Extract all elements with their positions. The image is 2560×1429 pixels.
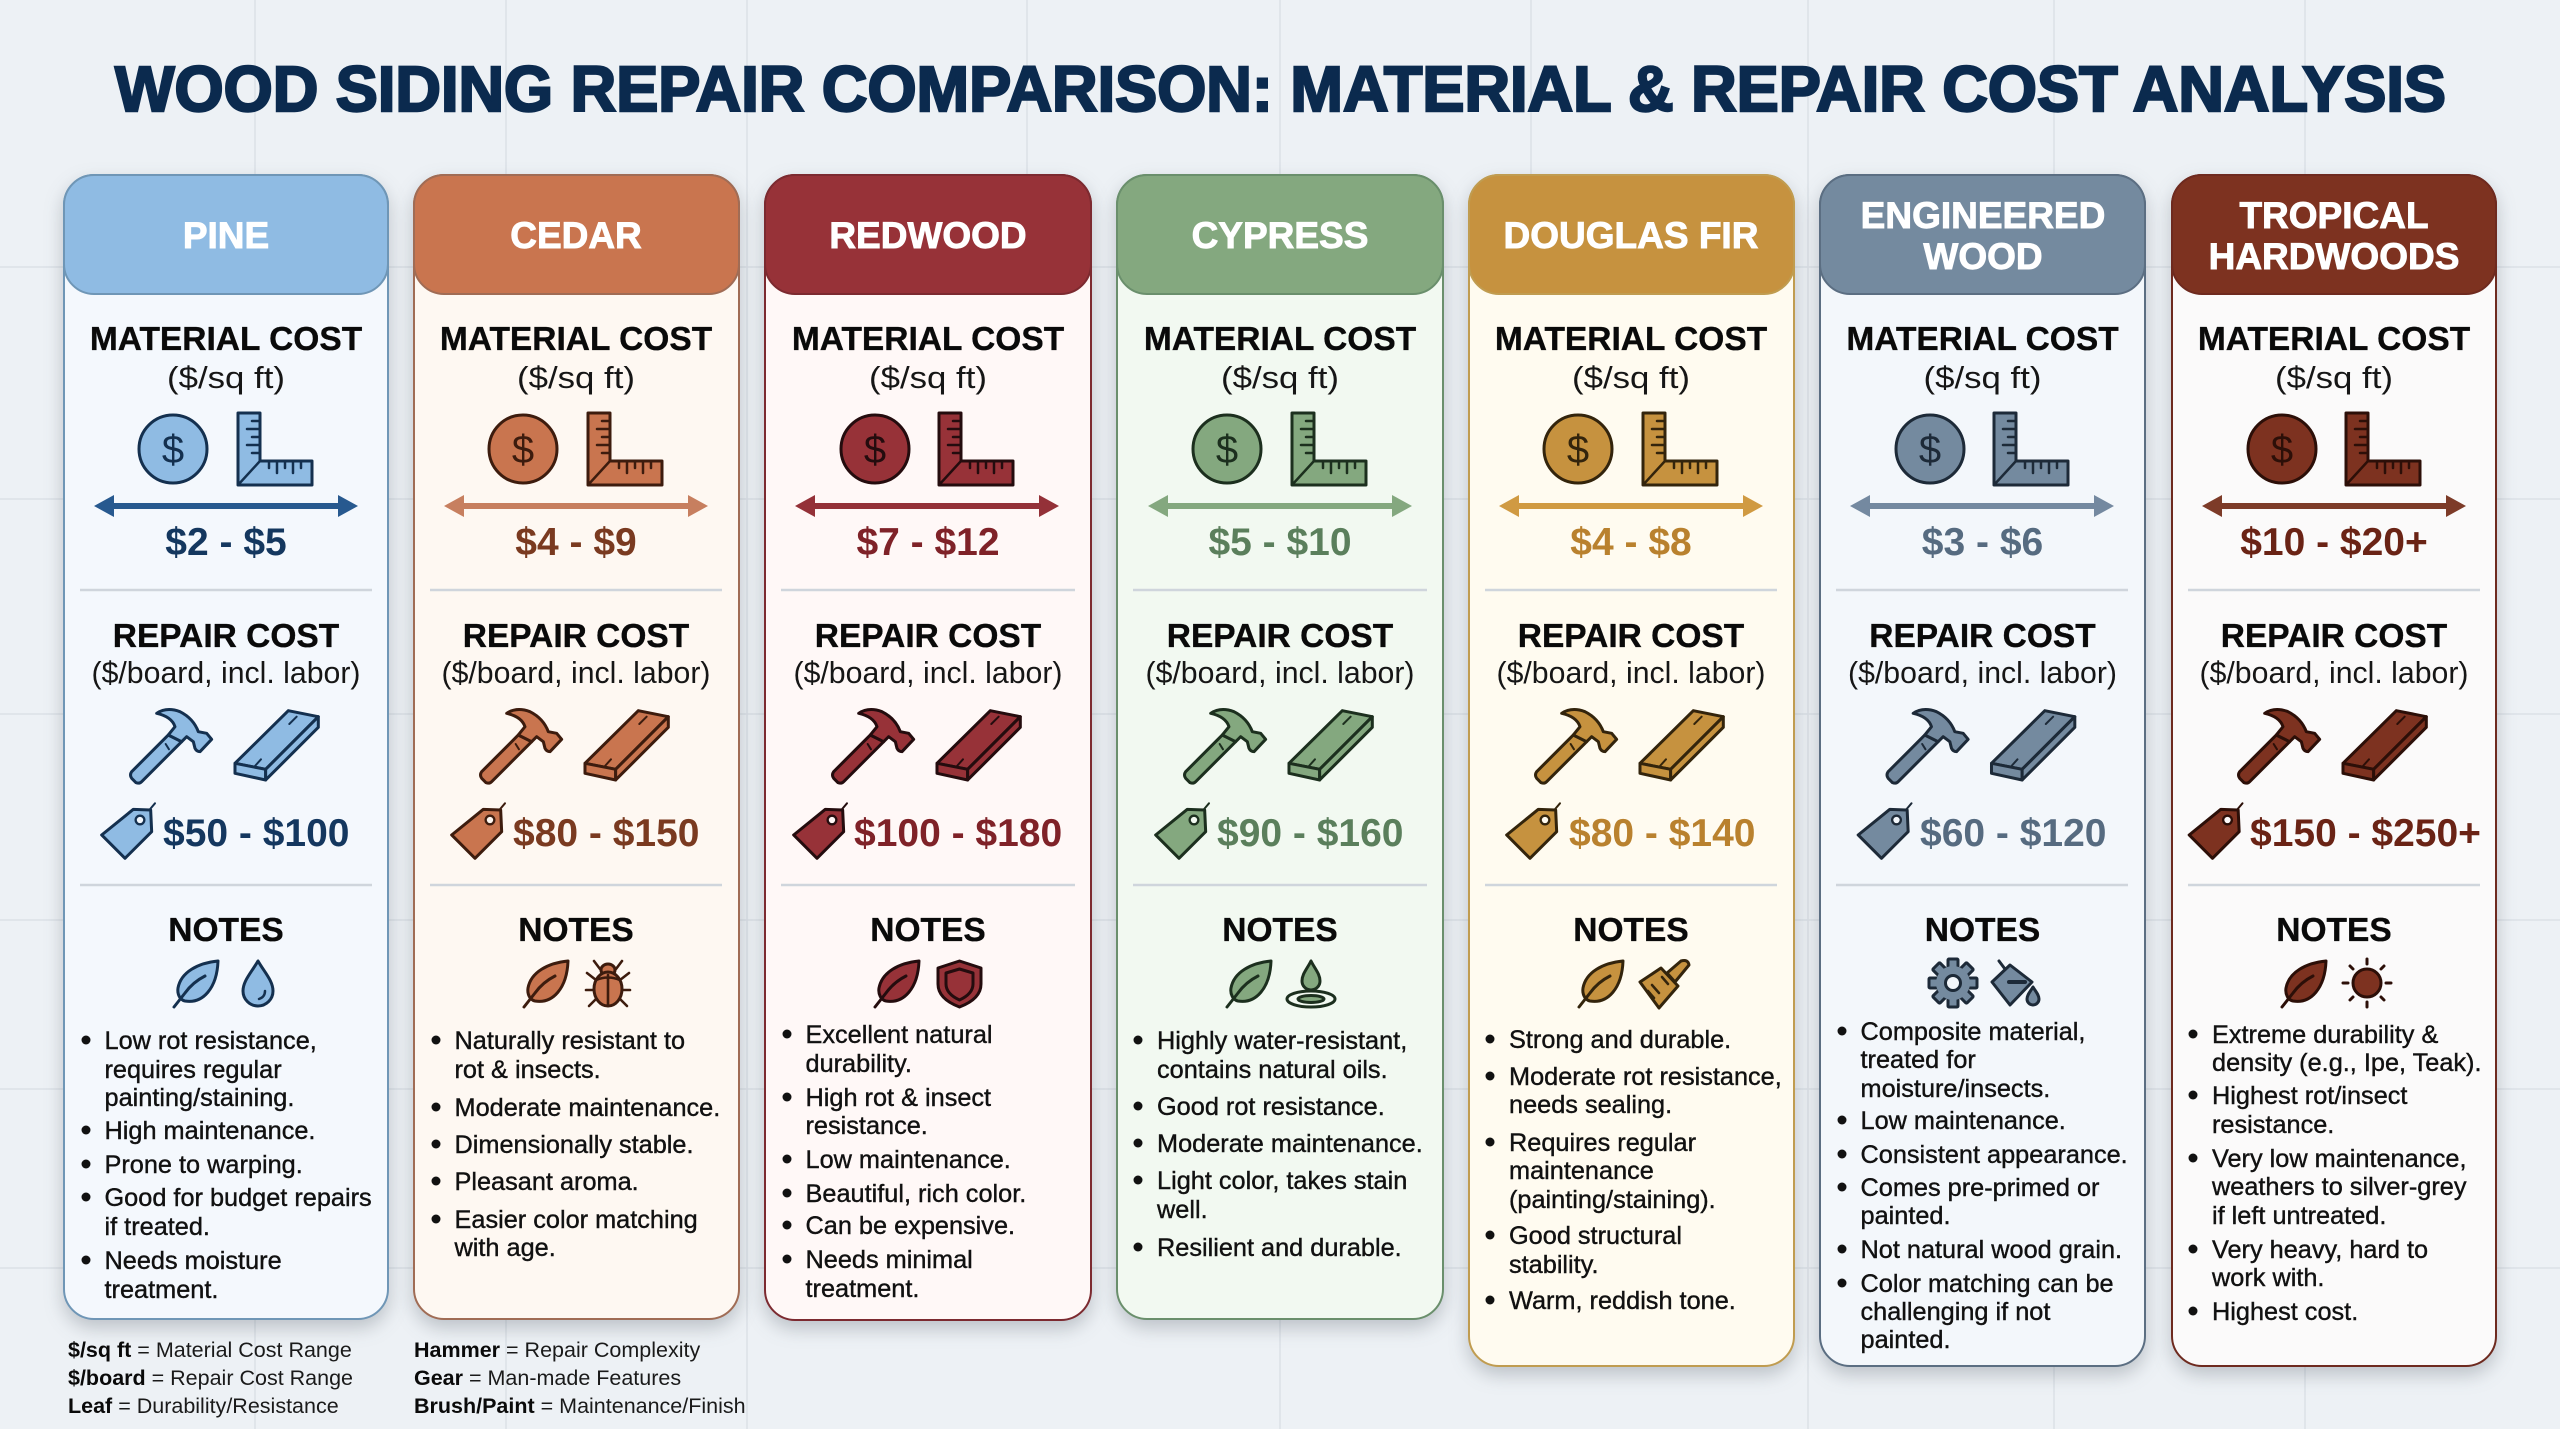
panel: redwood	[765, 175, 1091, 1320]
material price: $2 - $5	[165, 521, 287, 564]
legend: right column: Gear	[414, 1366, 464, 1390]
section: material cost: MATERIAL COST	[1846, 321, 2119, 358]
arrow: range	[795, 495, 1059, 517]
icon: coin: $	[864, 428, 886, 472]
header: tropical hardwoods	[2172, 175, 2496, 294]
card body	[414, 175, 739, 1319]
icon: coin	[1193, 415, 1261, 483]
notes list: challenging if not	[1860, 1298, 2050, 1326]
header: douglas fir: DOUGLAS FIR	[1504, 215, 1758, 256]
notes list: density (e.g., Ipe, Teak).	[2212, 1049, 2482, 1077]
section: material cost: ($/sq ft)	[1924, 360, 2042, 395]
card body	[2172, 175, 2496, 1366]
icon: board	[1289, 711, 1372, 780]
panel: douglas fir	[1469, 175, 1794, 1366]
icon: price tag	[102, 803, 155, 858]
section: material cost	[2198, 321, 2471, 564]
notes list: requires regular	[104, 1056, 282, 1084]
icon: coin	[1544, 415, 1612, 483]
notes list: Highest rot/insect	[2212, 1082, 2407, 1110]
repair price: $90 - $160	[1217, 812, 1404, 855]
notes list: resistance.	[806, 1112, 928, 1140]
notes list: Moderate rot resistance,	[1509, 1063, 1782, 1091]
notes list	[2188, 1021, 2482, 1326]
section: material cost	[440, 321, 713, 564]
notes list: painting/staining.	[104, 1084, 294, 1112]
notes list: Good rot resistance.	[1157, 1093, 1385, 1121]
legend: right column: Brush/Paint	[414, 1394, 535, 1418]
panel: engineered wood	[1820, 175, 2145, 1366]
notes list: rot & insects.	[454, 1056, 601, 1084]
section: repair cost	[1146, 618, 1414, 858]
section: repair cost	[2189, 618, 2481, 858]
section: material cost	[90, 321, 363, 564]
section: notes	[432, 912, 720, 1262]
section: material cost: MATERIAL COST	[440, 321, 713, 358]
notes list: Strong and durable.	[1509, 1026, 1731, 1054]
repair price: $80 - $150	[513, 812, 700, 855]
section: material cost: MATERIAL COST	[2198, 321, 2471, 358]
notes list: Color matching can be	[1860, 1270, 2114, 1298]
section: material cost	[792, 321, 1065, 564]
section: material cost: MATERIAL COST	[792, 321, 1065, 358]
icon: coin	[2248, 415, 2316, 483]
icon: coin	[1896, 415, 1964, 483]
notes list: Prone to warping.	[104, 1151, 303, 1179]
material price: $10 - $20+	[2240, 521, 2428, 564]
notes list	[432, 1027, 720, 1262]
notes list: Naturally resistant to	[454, 1027, 685, 1055]
section: repair cost	[442, 618, 710, 858]
notes list: Needs moisture	[104, 1247, 282, 1275]
repair price: $60 - $120	[1920, 812, 2106, 855]
header: tropical hardwoods: HARDWOODS	[2209, 236, 2459, 277]
notes list: contains natural oils.	[1157, 1056, 1388, 1084]
icon: board	[2343, 711, 2426, 780]
notes list: treatment.	[806, 1275, 919, 1303]
icon: coin	[139, 415, 207, 483]
notes list: (painting/staining).	[1509, 1186, 1716, 1214]
icon: coin: $	[162, 428, 184, 472]
notes list: Consistent appearance.	[1860, 1141, 2128, 1169]
icon: paint brush	[1640, 960, 1689, 1008]
section: material cost: MATERIAL COST	[1144, 321, 1417, 358]
icon: coin: $	[1567, 428, 1589, 472]
notes list: maintenance	[1509, 1157, 1654, 1185]
icon: square ruler	[1994, 413, 2068, 485]
section: repair cost	[794, 618, 1062, 858]
legend: left column: = Material Cost Range	[131, 1338, 352, 1362]
icon: hammer	[130, 710, 212, 783]
notes list: Dimensionally stable.	[454, 1131, 694, 1159]
notes list: Warm, reddish tone.	[1509, 1287, 1736, 1315]
legend: right column: = Repair Complexity	[500, 1338, 700, 1362]
notes list: resistance.	[2212, 1111, 2334, 1139]
legend: left column: $/sq ft	[68, 1338, 131, 1362]
header: pine: PINE	[183, 215, 269, 256]
icon: price tag	[794, 803, 847, 858]
section: notes: NOTES	[168, 912, 284, 949]
section: repair cost	[1496, 618, 1766, 858]
legend: left column: = Repair Cost Range	[146, 1366, 353, 1390]
section: material cost: ($/sq ft)	[2275, 360, 2393, 395]
icon: insect	[586, 961, 630, 1006]
repair price: $100 - $180	[854, 812, 1062, 855]
header: pine	[64, 175, 388, 294]
icon: coin: $	[2271, 428, 2293, 472]
icon: coin: $	[1216, 428, 1238, 472]
section: notes	[782, 912, 1026, 1303]
icon: hammer	[1184, 710, 1266, 783]
panel: cedar	[414, 175, 739, 1319]
notes list: Composite material,	[1860, 1018, 2085, 1046]
icon: shield	[938, 961, 981, 1007]
icon: coin: $	[512, 428, 534, 472]
notes list: painted.	[1860, 1202, 1951, 1230]
notes list: Not natural wood grain.	[1860, 1236, 2122, 1264]
header: redwood	[765, 175, 1091, 294]
section: material cost: ($/sq ft)	[869, 360, 987, 395]
notes list: Easier color matching	[454, 1206, 698, 1234]
section: material cost: ($/sq ft)	[167, 360, 285, 395]
arrow: range	[94, 495, 358, 517]
notes list: Very low maintenance,	[2212, 1145, 2467, 1173]
section: notes	[1486, 912, 1782, 1315]
legend: right column: = Maintenance/Finish	[535, 1394, 746, 1418]
arrow: range	[2202, 495, 2466, 517]
material price: $4 - $8	[1570, 521, 1692, 564]
notes list: Low rot resistance,	[104, 1027, 317, 1055]
arrow: range	[1148, 495, 1412, 517]
material price: $4 - $9	[515, 521, 637, 564]
repair price: $50 - $100	[163, 812, 350, 855]
notes list	[82, 1027, 372, 1304]
icon: hammer	[832, 710, 914, 783]
section: repair cost: REPAIR COST	[463, 618, 690, 655]
notes list: work with.	[2211, 1264, 2324, 1292]
icon: board	[937, 711, 1020, 780]
section: repair cost: REPAIR COST	[1518, 618, 1745, 655]
title: WOOD SIDING REPAIR COMPARISON: MATERIAL & REPAIR COST ANALYSIS	[115, 53, 2446, 125]
notes list: Highly water-resistant,	[1157, 1027, 1407, 1055]
icon: hammer	[480, 710, 562, 783]
repair price: $80 - $140	[1569, 812, 1756, 855]
notes list: moisture/insects.	[1860, 1075, 2050, 1103]
notes list: with age.	[454, 1234, 556, 1262]
section: notes: NOTES	[1222, 912, 1338, 949]
icon: price tag	[1858, 803, 1911, 858]
notes list: painted.	[1860, 1326, 1951, 1354]
notes list: Needs minimal	[806, 1246, 973, 1274]
icon: price tag	[1156, 803, 1209, 858]
legend: left column: $/board	[68, 1366, 146, 1390]
section: notes: NOTES	[518, 912, 634, 949]
icon: coin	[489, 415, 557, 483]
section: material cost	[1495, 321, 1768, 564]
notes list: Highest cost.	[2212, 1298, 2358, 1326]
section: material cost: MATERIAL COST	[90, 321, 363, 358]
legend: right column: = Man-made Features	[463, 1366, 681, 1390]
notes list: needs sealing.	[1509, 1091, 1672, 1119]
icon: sun	[2343, 959, 2391, 1007]
card body	[64, 175, 388, 1319]
section: notes: NOTES	[1925, 912, 2040, 949]
notes list: if left untreated.	[2212, 1202, 2386, 1230]
section: notes	[1134, 912, 1423, 1262]
notes list: treatment.	[104, 1276, 218, 1304]
icon: board	[235, 711, 318, 780]
icon: hammer	[2238, 710, 2320, 783]
header: engineered wood: WOOD	[1923, 236, 2043, 277]
arrow: range	[1499, 495, 1763, 517]
section: repair cost: ($/board, incl. labor)	[1146, 655, 1414, 690]
icon: leaf	[174, 961, 218, 1007]
icon: leaf	[2282, 961, 2326, 1007]
material price: $7 - $12	[856, 521, 1000, 564]
material price: $3 - $6	[1922, 521, 2043, 564]
panel: pine	[64, 175, 388, 1319]
notes list: stability.	[1509, 1251, 1599, 1279]
notes list: Moderate maintenance.	[454, 1094, 720, 1122]
panel: cypress	[1117, 175, 1443, 1319]
notes list	[1838, 1018, 2128, 1354]
notes list: High maintenance.	[104, 1117, 315, 1145]
notes list: Light color, takes stain	[1157, 1167, 1407, 1195]
notes list: Low maintenance.	[1860, 1107, 2066, 1135]
arrow: range	[444, 495, 708, 517]
notes list	[1486, 1026, 1782, 1315]
section: repair cost: ($/board, incl. labor)	[2200, 655, 2468, 690]
header: engineered wood: ENGINEERED	[1861, 195, 2105, 236]
notes list: weathers to silver-grey	[2211, 1173, 2467, 1201]
section: notes: NOTES	[2276, 912, 2392, 949]
icon: hammer	[1535, 710, 1617, 783]
icon: board	[1991, 711, 2075, 780]
icon: coin	[841, 415, 909, 483]
repair price: $150 - $250+	[2250, 812, 2481, 855]
notes list: Low maintenance.	[806, 1146, 1011, 1174]
section: repair cost: ($/board, incl. labor)	[794, 655, 1062, 690]
notes list: well.	[1156, 1196, 1208, 1224]
notes list: Good for budget repairs	[104, 1184, 372, 1212]
card body	[1117, 175, 1443, 1319]
section: notes: NOTES	[1573, 912, 1689, 949]
section: repair cost: ($/board, incl. labor)	[1848, 655, 2117, 690]
header: cypress	[1117, 175, 1443, 294]
section: repair cost: REPAIR COST	[2221, 618, 2448, 655]
section: repair cost: REPAIR COST	[1167, 618, 1394, 655]
notes list: Beautiful, rich color.	[806, 1180, 1026, 1208]
section: material cost: ($/sq ft)	[1221, 360, 1339, 395]
legend: right column: Hammer	[414, 1338, 501, 1362]
icon: coin: $	[1919, 428, 1941, 472]
notes list	[1134, 1027, 1423, 1262]
icon: square ruler	[588, 413, 662, 485]
notes list: Pleasant aroma.	[454, 1168, 639, 1196]
icon: price tag	[1507, 803, 1560, 858]
header: cedar	[414, 175, 739, 294]
icon: water ripple	[1287, 961, 1335, 1007]
section: notes: NOTES	[870, 912, 986, 949]
icon: gear	[1929, 959, 1977, 1007]
header: cedar: CEDAR	[510, 215, 642, 256]
header: tropical hardwoods: TROPICAL	[2239, 195, 2429, 236]
icon: price tag	[452, 803, 505, 858]
notes list	[782, 1021, 1026, 1303]
icon: square ruler	[939, 413, 1013, 485]
arrow: range	[1850, 495, 2114, 517]
icon: leaf	[524, 961, 568, 1007]
notes list: Extreme durability &	[2212, 1021, 2438, 1049]
legend: left column: Leaf	[68, 1394, 113, 1418]
notes list: durability.	[806, 1050, 912, 1078]
section: repair cost	[92, 618, 360, 858]
header: douglas fir	[1469, 175, 1794, 294]
notes list: Very heavy, hard to	[2212, 1236, 2428, 1264]
notes list: Comes pre-primed or	[1860, 1174, 2100, 1202]
notes list: Can be expensive.	[806, 1212, 1015, 1240]
section: repair cost: ($/board, incl. labor)	[442, 655, 710, 690]
icon: leaf	[1579, 961, 1623, 1007]
notes list: Resilient and durable.	[1157, 1234, 1402, 1262]
icon: water drop	[243, 961, 273, 1006]
icon: square ruler	[2346, 413, 2420, 485]
icon: square ruler	[1292, 413, 1366, 485]
notes list: if treated.	[104, 1213, 210, 1241]
card body	[765, 175, 1091, 1320]
section: notes	[2188, 912, 2482, 1326]
card body	[1469, 175, 1794, 1366]
section: material cost: ($/sq ft)	[1572, 360, 1690, 395]
section: notes	[82, 912, 372, 1304]
icon: square ruler	[238, 413, 312, 485]
icon: leaf	[875, 961, 919, 1007]
header: engineered wood	[1820, 175, 2145, 294]
section: material cost	[1144, 321, 1417, 564]
notes list: Requires regular	[1509, 1129, 1696, 1157]
card body	[1820, 175, 2145, 1366]
header: cypress: CYPRESS	[1192, 215, 1368, 256]
section: material cost	[1846, 321, 2119, 564]
section: repair cost	[1848, 618, 2117, 858]
section: repair cost: REPAIR COST	[815, 618, 1042, 655]
section: repair cost: REPAIR COST	[1869, 618, 2096, 655]
icon: price tag	[2189, 803, 2242, 858]
section: repair cost: ($/board, incl. labor)	[1496, 655, 1766, 690]
section: notes	[1838, 912, 2128, 1354]
section: repair cost: REPAIR COST	[113, 618, 340, 655]
notes list: Excellent natural	[806, 1021, 993, 1049]
icon: square ruler	[1643, 413, 1717, 485]
icon: leaf	[1227, 961, 1271, 1007]
notes list: High rot & insect	[806, 1084, 991, 1112]
icon: board	[585, 711, 668, 780]
section: repair cost: ($/board, incl. labor)	[92, 655, 360, 690]
icon: paint can	[1992, 961, 2039, 1005]
section: material cost: MATERIAL COST	[1495, 321, 1768, 358]
notes list: treated for	[1860, 1046, 1976, 1074]
icon: board	[1640, 711, 1723, 780]
notes list: Moderate maintenance.	[1157, 1130, 1423, 1158]
panel: tropical hardwoods	[2172, 175, 2496, 1366]
section: material cost: ($/sq ft)	[517, 360, 635, 395]
icon: hammer	[1887, 710, 1968, 783]
header: redwood: REDWOOD	[829, 215, 1027, 256]
legend: left column: = Durability/Resistance	[112, 1394, 339, 1418]
material price: $5 - $10	[1208, 521, 1352, 564]
notes list: Good structural	[1509, 1222, 1682, 1250]
